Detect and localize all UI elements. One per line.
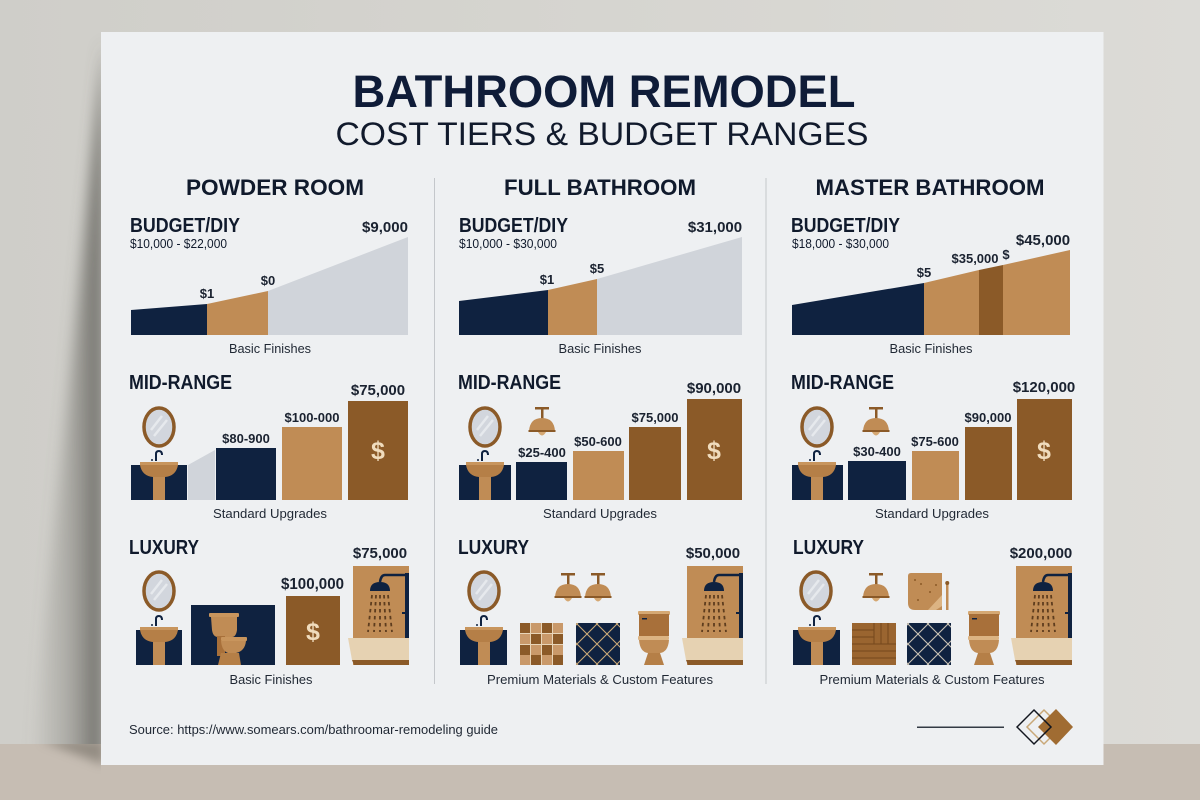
tier: mid-range powder room: $ [371,437,385,465]
tier: budget master bathroom: $5 [917,265,931,280]
tier: mid-range full bathroom: MID-RANGE [458,372,561,394]
floor [0,744,1200,800]
tier: luxury full bathroom [458,537,743,687]
tier: budget full bathroom: $5 [590,261,604,276]
tier: luxury full bathroom: Premium Materials & Custom Features [487,672,714,687]
tier: luxury master bathroom: LUXURY [793,537,865,559]
heading: master bathroom: MASTER BATHROOM [816,175,1044,200]
tier: mid-range master bathroom: MID-RANGE [791,372,894,394]
panel: master bathroom [791,175,1075,687]
tier: luxury master bathroom [793,537,1072,687]
tier: mid-range master bathroom: $75-600 [911,434,959,449]
tier: budget full bathroom: Basic Finishes [558,341,642,356]
tier: mid-range powder room: Standard Upgrades [213,506,327,521]
icon: stone sample [908,573,949,610]
tier: budget master bathroom [791,215,1070,356]
tier: budget powder room: $1 [200,286,214,301]
title: COST TIERS & BUDGET RANGES [336,116,868,152]
tier: budget master bathroom: $35,000 [952,251,998,266]
tier: budget master bathroom: Basic Finishes [890,341,973,356]
tier: budget powder room: $9,000 [362,219,408,236]
icon: toilet on navy [209,613,247,665]
icon: navy lattice tile [576,623,620,665]
tier: luxury powder room: $ [306,618,320,646]
poster shadow on floor [46,744,101,767]
tier: budget master bathroom: BUDGET/DIY [791,215,901,237]
tier: budget full bathroom: BUDGET/DIY [459,215,569,237]
tier: mid-range full bathroom: $25-400 [518,445,566,460]
tier: budget master bathroom: $45,000 [1016,232,1070,249]
tier: budget full bathroom: $10,000 - $30,000 [459,236,557,251]
tier: luxury master bathroom: Premium Materials & Custom Features [820,672,1045,687]
tier: mid-range powder room [129,372,408,521]
icon: navy lattice tile [907,623,951,665]
tier: budget master bathroom: $ [1002,247,1010,262]
source note: Source: https://www.somears.com/bathroomar-remodeling guide [129,722,498,737]
tier: mid-range full bathroom: $90,000 [687,380,741,397]
tier: mid-range full bathroom: $ [707,437,721,465]
poster shadow on wall [39,55,101,744]
tier: luxury full bathroom: $50,000 [686,545,740,562]
tier: mid-range master bathroom: Standard Upgrades [875,506,989,521]
tier: budget powder room: BUDGET/DIY [130,215,241,237]
tier: mid-range master bathroom [791,372,1075,521]
heading: powder room: POWDER ROOM [186,175,364,200]
tier: budget full bathroom: $31,000 [688,219,742,236]
tier: luxury full bathroom: LUXURY [458,537,530,559]
heading: full bathroom: FULL BATHROOM [504,175,696,200]
tier: luxury powder room: LUXURY [129,537,200,559]
tier: budget full bathroom: $1 [540,272,554,287]
icon: checker tiles [520,623,563,665]
tier: luxury powder room [129,537,409,687]
footer logo: line and diamonds [917,709,1073,745]
tier: budget powder room: $10,000 - $22,000 [130,236,227,251]
tier: mid-range powder room: $80-900 [222,431,270,446]
poster sheet [101,32,1104,765]
column dividers [434,178,766,684]
tier: mid-range powder room: MID-RANGE [129,372,232,394]
tier: luxury powder room: $75,000 [353,545,407,562]
tier: budget master bathroom: $18,000 - $30,000 [792,236,889,251]
tier: budget powder room: Basic Finishes [229,341,311,356]
tier: mid-range powder room: $75,000 [351,382,405,399]
tier: mid-range master bathroom: $30-400 [853,444,901,459]
title [336,66,868,152]
tier: mid-range master bathroom: $90,000 [964,410,1012,425]
tier: budget powder room: $0 [261,273,275,288]
tier: mid-range powder room: $100-000 [285,410,339,425]
tier: mid-range master bathroom: $ [1037,437,1051,465]
tier: budget full bathroom [459,215,742,356]
tier: mid-range full bathroom: Standard Upgrades [543,506,657,521]
tier: mid-range full bathroom [458,372,742,521]
panel: powder room [129,175,409,687]
tier: budget powder room [130,215,408,356]
tier: luxury powder room: $100,000 [281,576,344,593]
title: BATHROOM REMODEL [352,66,856,117]
panel: full bathroom [458,175,743,687]
tier: luxury master bathroom: $200,000 [1010,545,1072,562]
icon: wood parquet tile [852,623,896,665]
tier: luxury powder room: Basic Finishes [230,672,313,687]
tier: mid-range full bathroom: $50-600 [574,434,622,449]
tier: mid-range master bathroom: $120,000 [1013,379,1075,396]
tier: mid-range full bathroom: $75,000 [632,410,678,425]
